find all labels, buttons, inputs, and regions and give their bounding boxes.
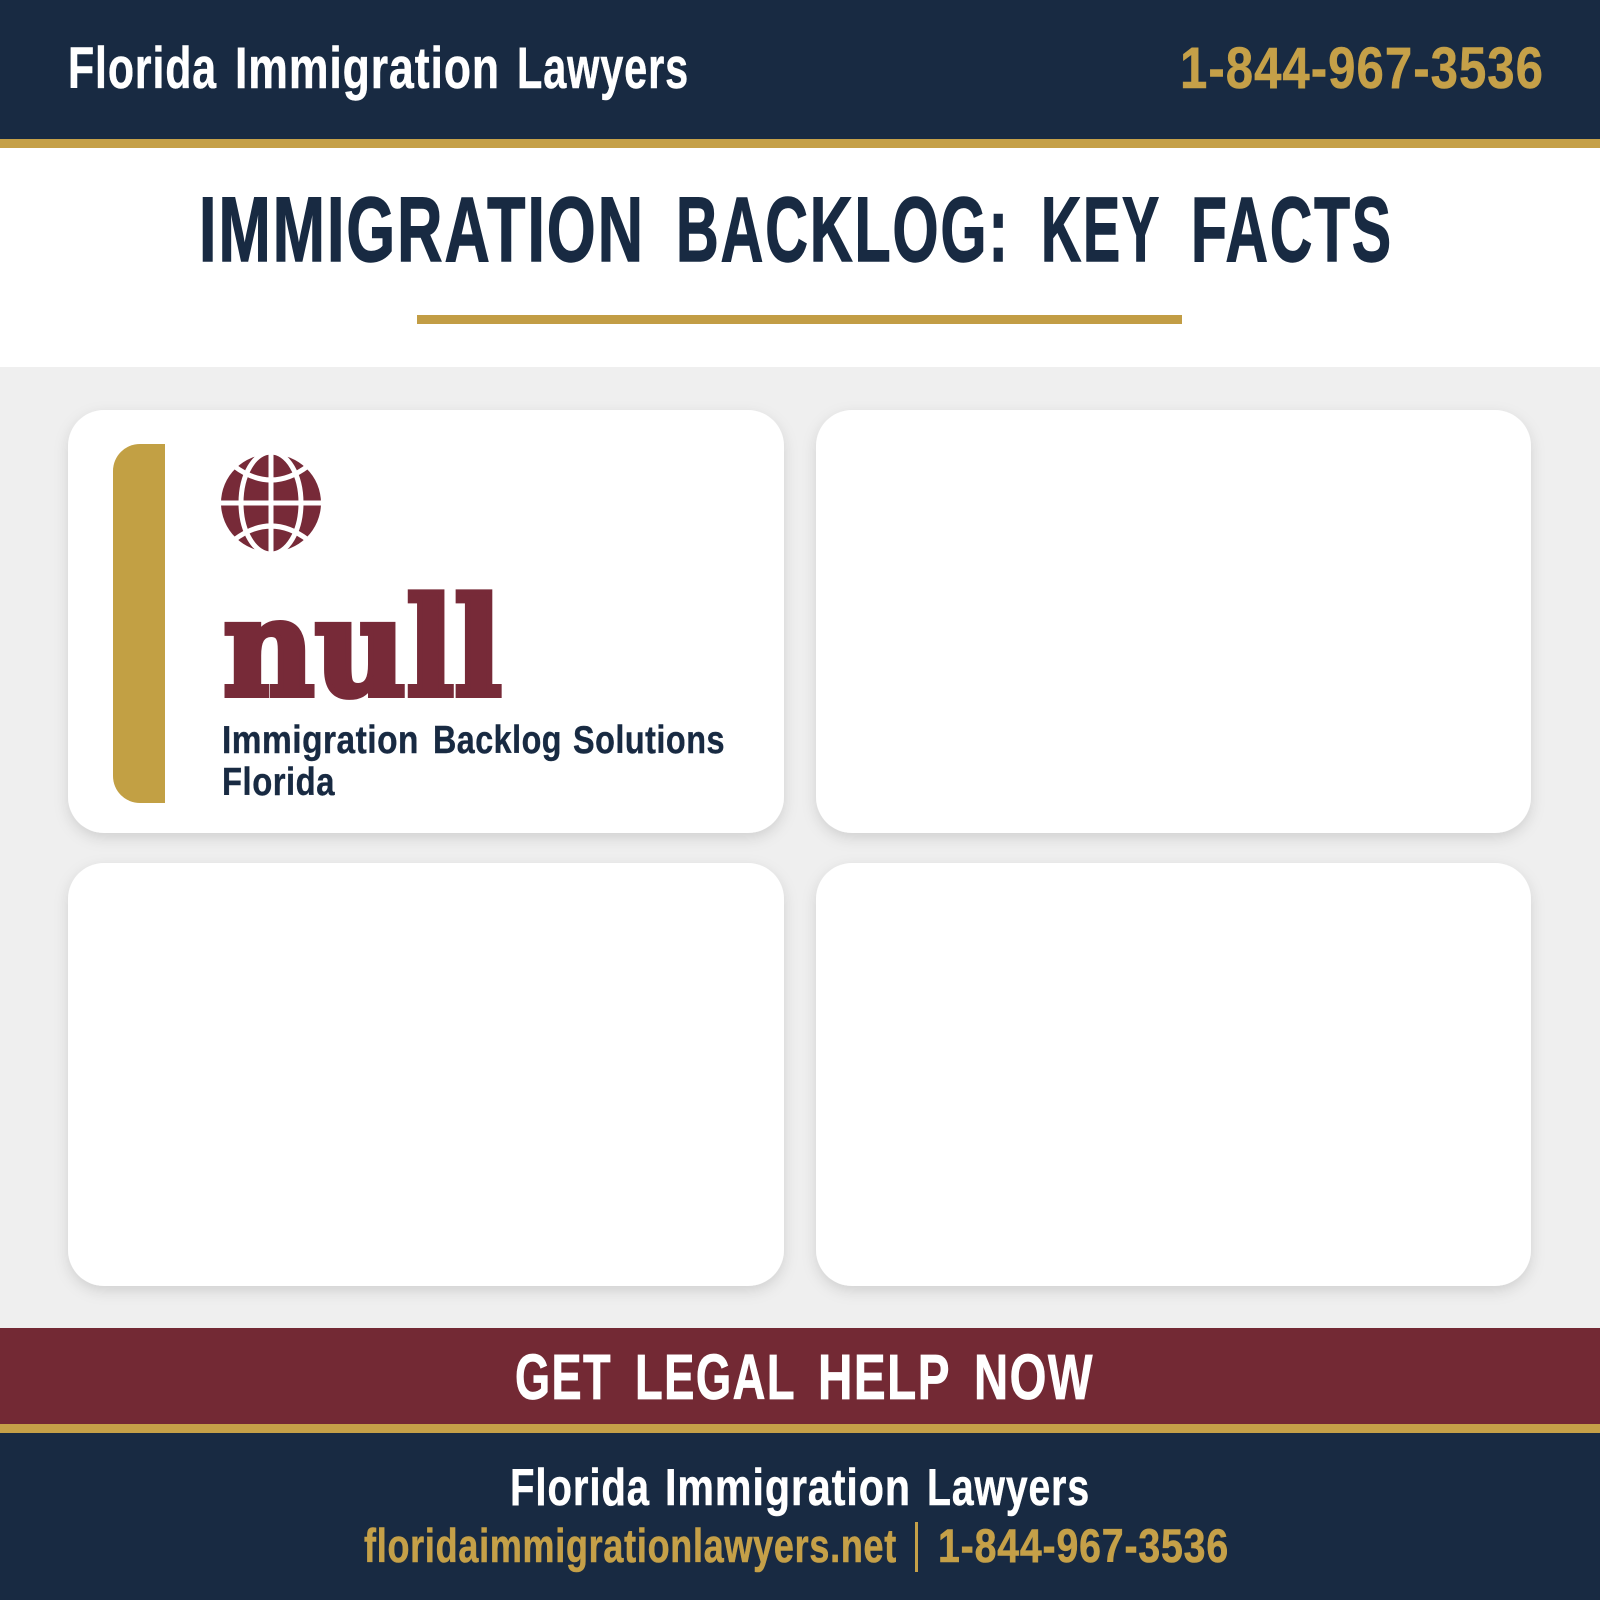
card subtitle: Immigration xyxy=(222,719,419,762)
panel: card 3 (empty) xyxy=(68,863,784,1286)
footer firm name: Florida xyxy=(510,1459,650,1517)
firm name: Florida xyxy=(68,36,217,101)
main title: FACTS xyxy=(1191,179,1393,281)
big word: null: null xyxy=(223,568,502,727)
icon: globe xyxy=(219,452,323,554)
call to action band xyxy=(0,1328,1600,1433)
call to action text xyxy=(515,1341,1094,1413)
main title: BACKLOG: xyxy=(676,179,1010,281)
panel: card 4 (empty) xyxy=(816,863,1531,1286)
footer firm name: Lawyers xyxy=(927,1459,1090,1517)
main title: IMMIGRATION xyxy=(199,179,645,281)
firm name xyxy=(68,36,689,101)
gold accent bar xyxy=(113,444,165,803)
top header band xyxy=(0,0,1600,148)
card subtitle xyxy=(222,719,725,804)
footer website: floridaimmigrationlawyers.net xyxy=(364,1519,897,1572)
call to action text: NOW xyxy=(974,1341,1094,1413)
panel: card 1 xyxy=(68,410,784,833)
phone number: 1-844-967-3536 xyxy=(1180,36,1544,101)
footer firm name xyxy=(510,1459,1090,1517)
card subtitle: Backlog xyxy=(433,719,562,762)
firm name: Immigration xyxy=(235,36,500,101)
firm name: Lawyers xyxy=(517,36,689,101)
footer phone: 1-844-967-3536 xyxy=(938,1519,1229,1572)
footer firm name: Immigration xyxy=(665,1459,911,1517)
call to action text: HELP xyxy=(818,1341,951,1413)
panel: card 2 (empty) xyxy=(816,410,1531,833)
title underline xyxy=(417,315,1182,324)
call to action text: LEGAL xyxy=(635,1341,796,1413)
card subtitle: Florida xyxy=(222,761,335,804)
card subtitle: Solutions xyxy=(573,719,725,762)
title section xyxy=(0,148,1600,367)
main title xyxy=(199,179,1393,281)
call to action text: GET xyxy=(515,1341,612,1413)
footer band xyxy=(0,1433,1600,1600)
main title: KEY xyxy=(1041,179,1161,281)
